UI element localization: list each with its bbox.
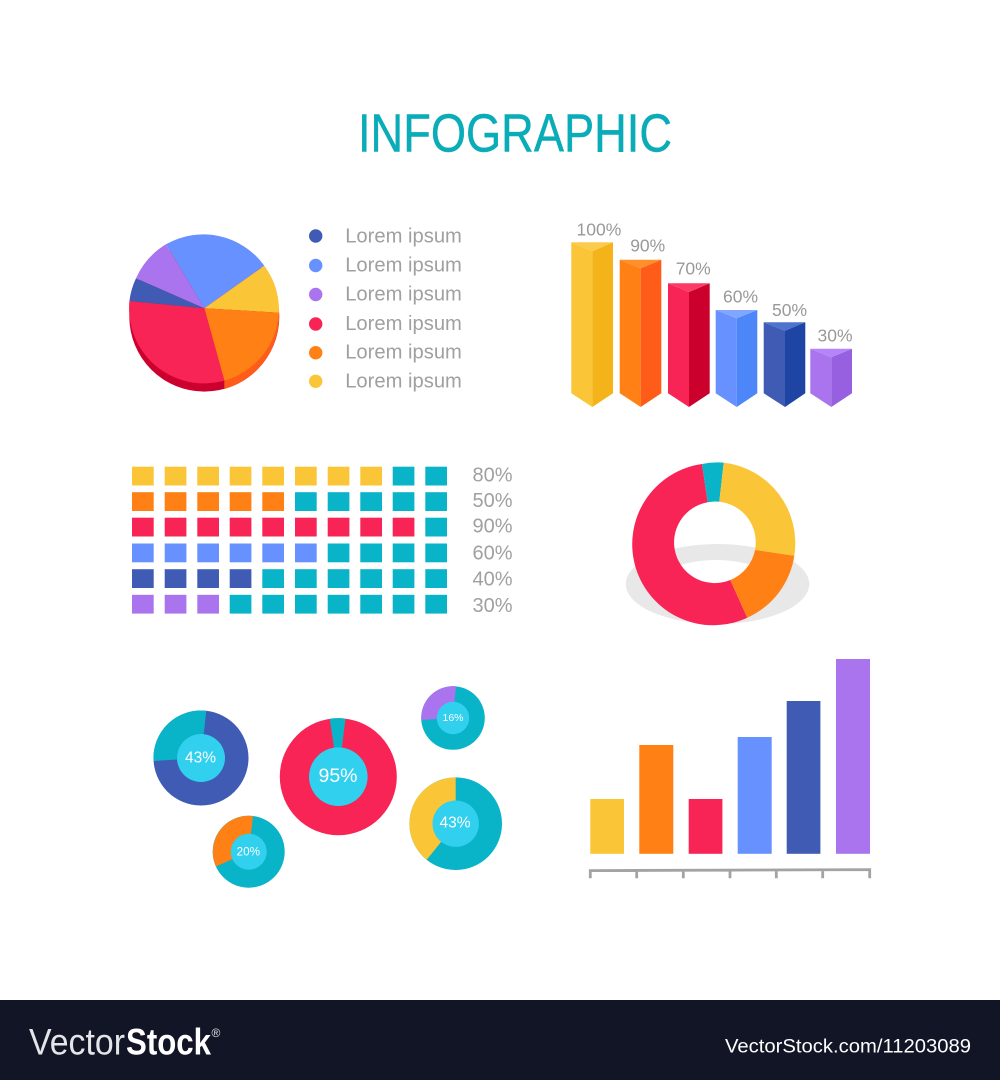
bubble: 43% dark blue: 43% bbox=[185, 750, 216, 767]
3D bar: purple 30% bbox=[810, 349, 852, 407]
panel: column chart bbox=[590, 659, 870, 878]
donut segment: yellow bbox=[719, 463, 795, 556]
bar label 100%: 100% bbox=[576, 219, 621, 239]
slice: light blue bbox=[166, 234, 264, 308]
panel: 3D pie chart bbox=[129, 234, 279, 392]
slice: dark blue bbox=[129, 278, 204, 308]
donut segment: teal bbox=[702, 462, 724, 502]
column: dark blue bbox=[787, 701, 820, 854]
grid percentage labels: 30% bbox=[472, 595, 513, 617]
legend label 6: Lorem ipsum bbox=[345, 371, 462, 393]
legend dot: yellow bbox=[309, 375, 322, 388]
column: red bbox=[689, 799, 722, 854]
grid row: dark blue 40% bbox=[132, 569, 447, 588]
bar label 90%: 90% bbox=[630, 236, 665, 256]
bubble: 43% dark blue bbox=[153, 710, 248, 806]
slice: yellow bbox=[204, 266, 279, 313]
bubble: 20% orange: 20% bbox=[237, 845, 260, 858]
legend label 4: Lorem ipsum bbox=[345, 313, 462, 335]
column: purple bbox=[836, 659, 870, 854]
column chart axis bbox=[590, 870, 870, 878]
column: light blue bbox=[738, 737, 772, 854]
bubble: 95% red bbox=[280, 718, 397, 835]
donut segment: red bbox=[632, 464, 747, 625]
bar label 30%: 30% bbox=[818, 326, 853, 346]
pie side: red bbox=[129, 242, 279, 392]
bubble: 20% orange bbox=[213, 816, 285, 888]
pie side: orange bbox=[224, 309, 279, 389]
bubble: 95% red: 95% bbox=[318, 765, 358, 787]
bubble: 43% yellow bbox=[409, 777, 502, 870]
title: INFOGRAPHIC bbox=[358, 104, 672, 164]
grid row: yellow 80% bbox=[132, 467, 447, 486]
footer image id: VectorStock.com/11203089 bbox=[725, 1037, 971, 1058]
column: orange bbox=[639, 745, 673, 854]
bubble: 16% purple bbox=[421, 686, 485, 750]
bubble: 16% purple: 16% bbox=[442, 712, 464, 724]
legend dot: purple bbox=[309, 288, 322, 301]
column: yellow bbox=[590, 799, 624, 854]
footer bar bbox=[0, 1000, 1000, 1080]
slice: purple bbox=[136, 244, 204, 308]
bubble: 43% yellow: 43% bbox=[439, 815, 471, 832]
grid row: red 90% bbox=[132, 518, 447, 536]
grid percentage labels: 40% bbox=[472, 569, 513, 591]
footer logo: registered mark: ® bbox=[212, 1026, 220, 1040]
panel: percentage bubble charts bbox=[153, 686, 502, 888]
3D bar: red 70% bbox=[668, 283, 710, 407]
3D bar: dark blue 50% bbox=[764, 322, 805, 407]
bar label 60%: 60% bbox=[723, 287, 758, 307]
grid row: purple 30% bbox=[132, 595, 447, 614]
3D bar: light blue 60% bbox=[716, 310, 757, 407]
legend dot: red bbox=[309, 317, 322, 331]
legend label 2: Lorem ipsum bbox=[345, 255, 462, 277]
footer logo: Stock: Stock bbox=[126, 1021, 211, 1062]
legend dot: dark blue bbox=[309, 229, 322, 243]
legend label 1: Lorem ipsum bbox=[345, 226, 462, 248]
grid percentage labels bbox=[472, 464, 513, 617]
grid row: light blue 60% bbox=[132, 544, 447, 562]
grid row: orange 50% bbox=[132, 492, 447, 511]
grid percentage labels: 80% bbox=[472, 464, 513, 486]
legend dot: orange bbox=[309, 346, 322, 359]
footer background bbox=[0, 1000, 1000, 1080]
panel: 3D bar chart bbox=[571, 219, 853, 407]
shadow inner cutout bbox=[656, 560, 776, 612]
slice: orange bbox=[204, 308, 279, 381]
footer logo: Vector: Vector bbox=[29, 1021, 125, 1062]
legend dot: light blue bbox=[309, 259, 322, 272]
panel: donut chart with shadow bbox=[626, 462, 809, 625]
grid percentage labels: 90% bbox=[472, 516, 513, 538]
3D bar: yellow 100% bbox=[571, 242, 613, 407]
bar label 50%: 50% bbox=[772, 300, 807, 320]
3D bar: orange 90% bbox=[620, 260, 661, 407]
legend label 3: Lorem ipsum bbox=[345, 283, 462, 305]
bar label 70%: 70% bbox=[676, 259, 711, 279]
grid percentage labels: 50% bbox=[472, 490, 513, 512]
grid percentage labels: 60% bbox=[472, 542, 513, 564]
slice: red bbox=[129, 301, 224, 383]
legend label 5: Lorem ipsum bbox=[345, 342, 462, 364]
donut shadow bbox=[626, 544, 809, 624]
pie legend bbox=[309, 226, 462, 393]
panel: square grid chart bbox=[132, 464, 513, 617]
donut segment: orange bbox=[730, 550, 794, 618]
